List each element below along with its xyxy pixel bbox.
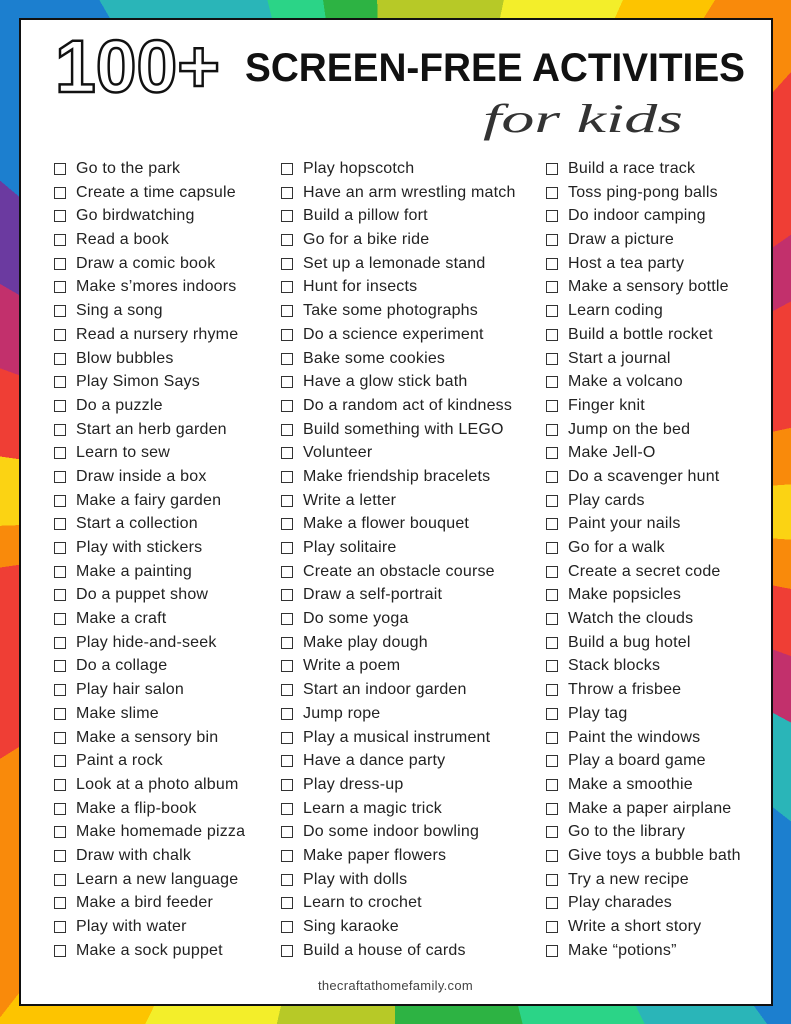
column 1 list: Paint a rock: [76, 752, 163, 769]
column 1 list: Make a painting: [76, 563, 192, 580]
column 2 list: Hunt for insects: [303, 278, 417, 295]
column 3 list: Toss ping-pong balls: [568, 184, 718, 201]
column 1 list: Do a puppet show: [76, 586, 208, 603]
column 3 list: Do indoor camping: [568, 207, 706, 224]
column 2 list: Play hopscotch: [303, 160, 414, 177]
column 2 list: Draw a self-portrait: [303, 586, 442, 603]
column 1 list: Play hide-and-seek: [76, 634, 217, 651]
column 1 list: Draw a comic book: [76, 255, 215, 272]
column 3 list: Paint the windows: [568, 728, 700, 746]
column 1 list: Learn to sew: [76, 444, 170, 461]
column 3 list: Build a bottle rocket: [568, 326, 713, 343]
column 2 list: Do a science experiment: [303, 326, 484, 343]
column 1 list: Sing a song: [76, 302, 163, 319]
column 2 list: Play solitaire: [303, 539, 397, 556]
column 1 list: Make s’mores indoors: [76, 278, 236, 295]
column 1 list: Play with stickers: [76, 539, 202, 556]
column 1 list: Make a sensory bin: [76, 728, 218, 746]
column 2 list: Set up a lemonade stand: [303, 255, 486, 272]
column 2 list: Do some indoor bowling: [303, 823, 479, 840]
column 3 list: Host a tea party: [568, 255, 684, 272]
column 1 list: Play with water: [76, 918, 187, 935]
column 1 list: Look at a photo album: [76, 776, 239, 793]
column 2 list: Volunteer: [303, 444, 372, 461]
column 3 list: Make popsicles: [568, 586, 681, 603]
column 2 list: Do a random act of kindness: [303, 397, 512, 414]
column 2 list: Write a poem: [303, 657, 400, 674]
column 2 list: Learn a magic trick: [303, 800, 442, 817]
column 2 list: Make a flower bouquet: [303, 515, 469, 532]
column 1 list: Do a collage: [76, 657, 167, 674]
column 1 list: Blow bubbles: [76, 350, 174, 366]
column 2 list: Jump rope: [303, 705, 380, 722]
column 3 list: Play a board game: [568, 752, 706, 769]
column 3 list: Make a paper airplane: [568, 800, 731, 817]
column 2 list: Do some yoga: [303, 610, 409, 627]
column 2 list: Go for a bike ride: [303, 231, 429, 248]
column 1 list: [54, 160, 246, 959]
column 2 list: Have a glow stick bath: [303, 373, 467, 390]
column 1 list: Draw with chalk: [76, 847, 191, 864]
column 1 list: Make homemade pizza: [76, 823, 245, 840]
column 3 list: Make a sensory bottle: [568, 278, 729, 295]
column 1 list: Make a craft: [76, 610, 166, 627]
title text: SCREEN-FREE ACTIVITIES: [245, 46, 745, 90]
column 3 list: Make Jell-O: [568, 444, 656, 461]
column 2 list: Play a musical instrument: [303, 728, 490, 746]
column 3 list: Go for a walk: [568, 539, 665, 556]
column 2 list: Play dress-up: [303, 776, 403, 793]
column 2 list: Bake some cookies: [303, 350, 445, 366]
column 1 list: Draw inside a box: [76, 468, 207, 485]
column 3 list: Watch the clouds: [568, 610, 693, 627]
column 2 list: Take some photographs: [303, 302, 478, 319]
title: [55, 25, 745, 141]
column 3 list: Give toys a bubble bath: [568, 847, 741, 864]
column 3 list: Build a race track: [568, 160, 695, 177]
column 1 list: Play Simon Says: [76, 373, 200, 390]
column 3 list: Stack blocks: [568, 657, 660, 674]
column 3 list: Throw a frisbee: [568, 681, 681, 698]
column 1 list: Make a sock puppet: [76, 942, 223, 959]
subtitle for kids: for kids: [483, 96, 683, 141]
column 2 list: Build a pillow fort: [303, 207, 428, 224]
column 3 list: Write a short story: [568, 918, 701, 935]
column 3 list: Build a bug hotel: [568, 634, 691, 651]
column 1 list: Go to the park: [76, 160, 180, 177]
column 3 list: Create a secret code: [568, 563, 721, 580]
column 2 list: Make friendship bracelets: [303, 468, 490, 485]
title number 100+: 100+: [55, 25, 220, 108]
column 2 list: Learn to crochet: [303, 894, 422, 911]
column 1 list: Start a collection: [76, 515, 198, 532]
column 1 list: Make a flip-book: [76, 800, 197, 817]
column 1 list: Make a fairy garden: [76, 492, 221, 509]
column 1 list: Start an herb garden: [76, 421, 227, 438]
column 2 list: Play with dolls: [303, 871, 407, 888]
column 3 list: Paint your nails: [568, 515, 681, 532]
column 2 list: Make paper flowers: [303, 847, 446, 864]
column 3 list: Play charades: [568, 894, 672, 911]
footer url: thecraftathomefamily.com: [318, 978, 473, 993]
column 1 list: Make slime: [76, 705, 159, 722]
column 3 list: Start a journal: [568, 350, 671, 366]
column 3 list: Finger knit: [568, 397, 645, 414]
column 3 list: Draw a picture: [568, 231, 674, 248]
column 3 list: Make a smoothie: [568, 776, 693, 793]
column 1 list: Read a nursery rhyme: [76, 326, 238, 343]
column 1 list: Do a puzzle: [76, 397, 163, 414]
column 3 list: Go to the library: [568, 823, 685, 840]
column 2 list: Build something with LEGO: [303, 421, 504, 438]
column 2 list: [281, 160, 516, 959]
column 2 list: Sing karaoke: [303, 918, 399, 935]
column 2 list: Have a dance party: [303, 752, 445, 769]
column 2 list: Write a letter: [303, 492, 396, 509]
column 3 list: Play tag: [568, 705, 627, 722]
column 1 list: Learn a new language: [76, 871, 238, 888]
column 3 list: Jump on the bed: [568, 421, 690, 438]
column 1 list: Make a bird feeder: [76, 894, 213, 911]
column 3 list: Play cards: [568, 492, 645, 509]
column 1 list: Go birdwatching: [76, 207, 195, 224]
column 2 list: Build a house of cards: [303, 942, 466, 959]
column 3 list: Make a volcano: [568, 373, 683, 390]
column 3 list: Make “potions”: [568, 942, 677, 959]
column 1 list: Play hair salon: [76, 681, 184, 698]
column 2 list: Have an arm wrestling match: [303, 184, 516, 201]
column 2 list: Make play dough: [303, 634, 428, 651]
column 2 list: Create an obstacle course: [303, 563, 495, 580]
column 1 list: Read a book: [76, 231, 169, 248]
column 3 list: [546, 160, 741, 959]
column 3 list: Try a new recipe: [568, 871, 689, 888]
column 3 list: Do a scavenger hunt: [568, 468, 719, 485]
column 3 list: Learn coding: [568, 302, 663, 319]
column 2 list: Start an indoor garden: [303, 681, 467, 698]
column 1 list: Create a time capsule: [76, 184, 236, 201]
